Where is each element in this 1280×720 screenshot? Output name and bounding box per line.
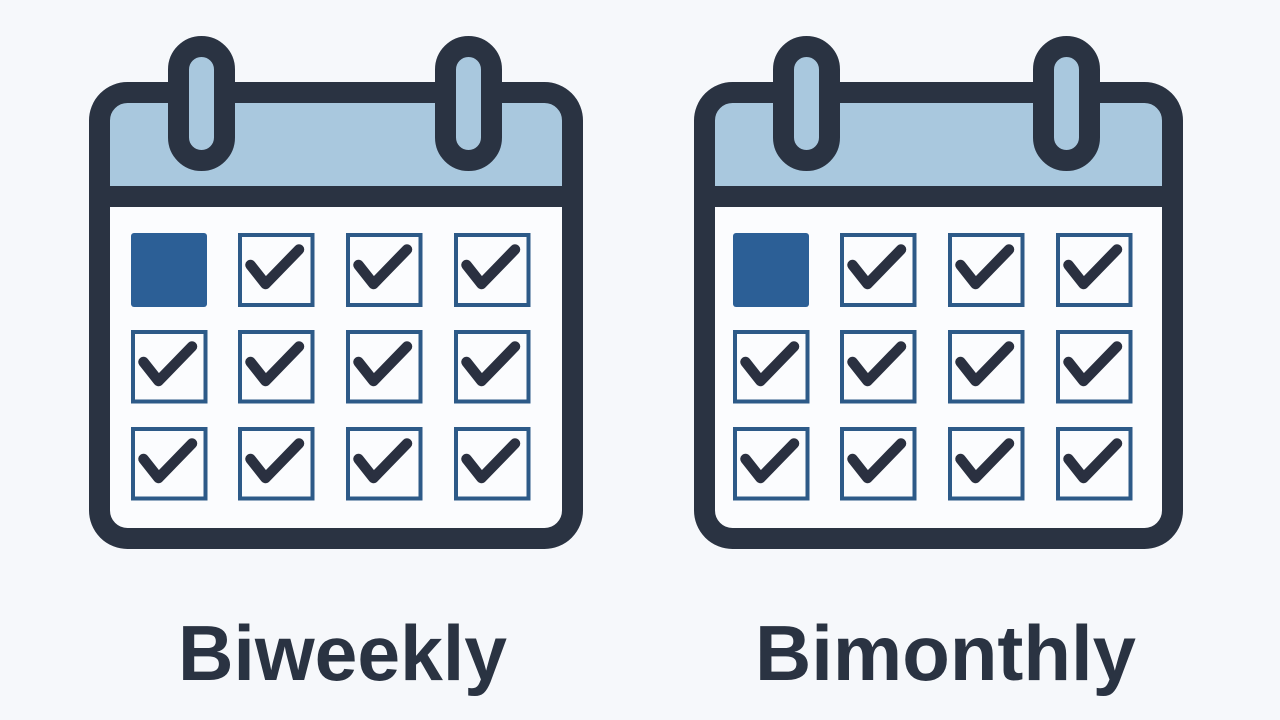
- checked day: [133, 429, 206, 498]
- checked day: [133, 332, 206, 402]
- binder ring right: [1044, 46, 1090, 160]
- checked day: [950, 332, 1022, 402]
- checked day: [456, 429, 528, 498]
- day grid: [733, 233, 1130, 498]
- checked day: [735, 429, 808, 498]
- checked day: [348, 429, 420, 498]
- checked day: [456, 332, 528, 402]
- biweekly calendar: [100, 46, 572, 538]
- checked day: [1058, 235, 1130, 305]
- checked day: [950, 235, 1022, 305]
- label: bimonthly: Bimonthly: [755, 609, 1136, 697]
- day grid: [131, 233, 528, 498]
- checked day: [842, 429, 914, 498]
- highlighted start day: [131, 233, 207, 307]
- binder ring left: [178, 46, 224, 160]
- checked day: [1058, 429, 1130, 498]
- checked day: [348, 332, 420, 402]
- calendar page body: [704, 92, 1172, 538]
- calendar page body: [100, 92, 572, 538]
- label: biweekly: Biweekly: [178, 609, 507, 697]
- highlighted start day: [733, 233, 809, 307]
- calendar outline: [100, 92, 572, 538]
- checked day: [348, 235, 420, 305]
- checked day: [950, 429, 1022, 498]
- checked day: [842, 332, 914, 402]
- checked day: [842, 235, 914, 305]
- binder ring left: [784, 46, 830, 160]
- checked day: [456, 235, 528, 305]
- checked day: [240, 235, 312, 305]
- bimonthly calendar: [704, 46, 1172, 538]
- calendar header band: [704, 92, 1172, 196]
- checked day: [240, 332, 312, 402]
- binder ring right: [446, 46, 492, 160]
- checked day: [1058, 332, 1130, 402]
- calendar header band: [100, 92, 572, 196]
- calendar outline: [704, 92, 1172, 538]
- checked day: [735, 332, 808, 402]
- checked day: [240, 429, 312, 498]
